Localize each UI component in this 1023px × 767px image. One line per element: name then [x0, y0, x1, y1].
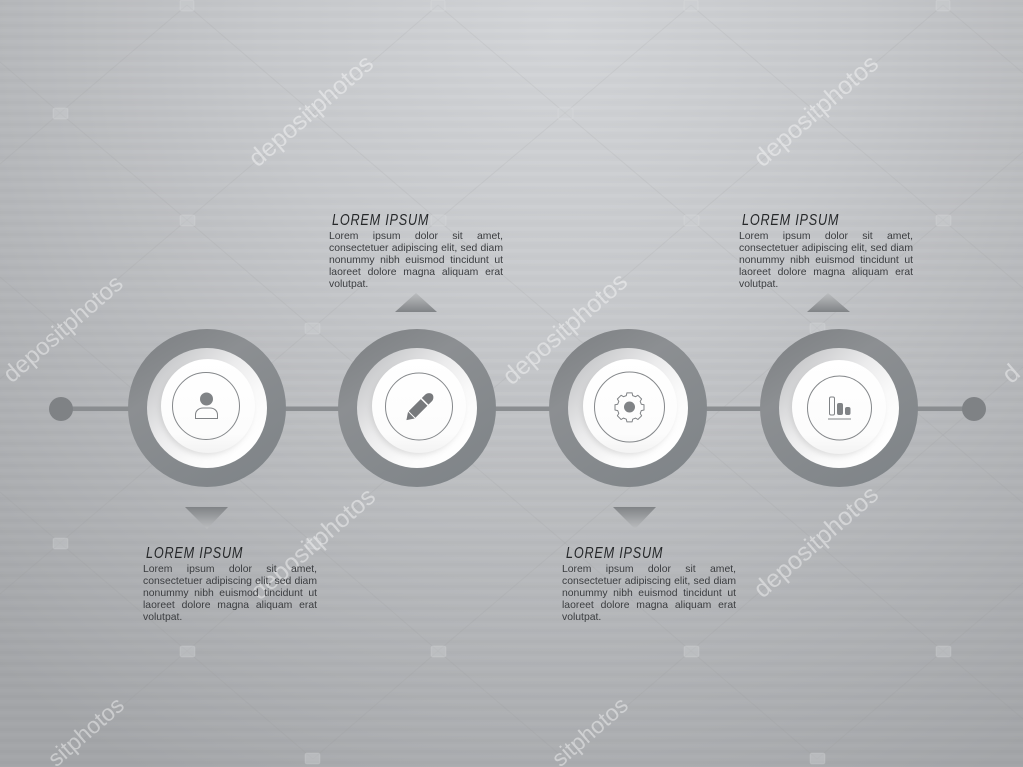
- text block: step 1: volutpat.: [143, 612, 182, 623]
- text block: step 4: Lorem ipsum dolor sit amet,: [739, 231, 913, 242]
- arrow: step 1 down: [185, 507, 228, 529]
- text block: step 4: laoreet dolore magna aliquam erat: [739, 267, 913, 278]
- text block: step 3: LOREM IPSUM: [566, 545, 663, 562]
- text block: step 2: volutpat.: [329, 279, 368, 290]
- text block: step 4: LOREM IPSUM: [742, 212, 839, 229]
- step 4 node: [760, 329, 918, 487]
- arrow: step 2 up: [395, 293, 437, 312]
- text block: step 4: [739, 212, 913, 290]
- step 2 node: [338, 329, 496, 487]
- step 1 node: [128, 329, 286, 487]
- watermark text: depositphotos: [0, 270, 128, 388]
- watermark text: depositphotos: [245, 482, 381, 606]
- icon: person: [196, 392, 218, 418]
- text block: step 1: laoreet dolore magna aliquam erat: [143, 600, 317, 611]
- icon: pencil: [403, 391, 436, 423]
- text block: step 2: nonummy nibh euismod tincidunt ut: [329, 255, 503, 266]
- text block: step 1: [143, 545, 317, 623]
- text block: step 2: consectetuer adipiscing elit, sed diam: [329, 243, 503, 254]
- watermark text: depositphotos: [748, 480, 884, 604]
- text block: step 4: consectetuer adipiscing elit, sed diam: [739, 243, 913, 254]
- text block: step 4: nonummy nibh euismod tincidunt ut: [739, 255, 913, 266]
- text block: step 1: Lorem ipsum dolor sit amet,: [143, 564, 317, 575]
- text block: step 2: laoreet dolore magna aliquam erat: [329, 267, 503, 278]
- icon: bar chart: [828, 397, 851, 420]
- text block: step 3: Lorem ipsum dolor sit amet,: [562, 564, 736, 575]
- watermark text: depositphotos: [497, 267, 633, 391]
- text block: step 3: nonummy nibh euismod tincidunt ut: [562, 588, 736, 599]
- watermark text: depositphotos: [748, 49, 884, 173]
- text block: step 1: consectetuer adipiscing elit, sed diam: [143, 576, 317, 587]
- text block: step 3: consectetuer adipiscing elit, sed diam: [562, 576, 736, 587]
- text block: step 3: [562, 545, 736, 623]
- text block: step 2: [329, 212, 503, 290]
- arrow: step 3 down: [613, 507, 656, 529]
- icon: gear: [615, 393, 644, 422]
- watermark text: depositphotos: [243, 49, 379, 173]
- arrow: step 4 up: [807, 293, 850, 312]
- text block: step 1: nonummy nibh euismod tincidunt ut: [143, 588, 317, 599]
- text block: step 3: laoreet dolore magna aliquam erat: [562, 600, 736, 611]
- text block: step 2: LOREM IPSUM: [332, 212, 429, 229]
- text block: step 4: volutpat.: [739, 279, 778, 290]
- text block: step 3: volutpat.: [562, 612, 601, 623]
- timeline axis: [49, 397, 986, 421]
- step 3 node: [549, 329, 707, 487]
- text block: step 2: Lorem ipsum dolor sit amet,: [329, 231, 503, 242]
- text block: step 1: LOREM IPSUM: [146, 545, 243, 562]
